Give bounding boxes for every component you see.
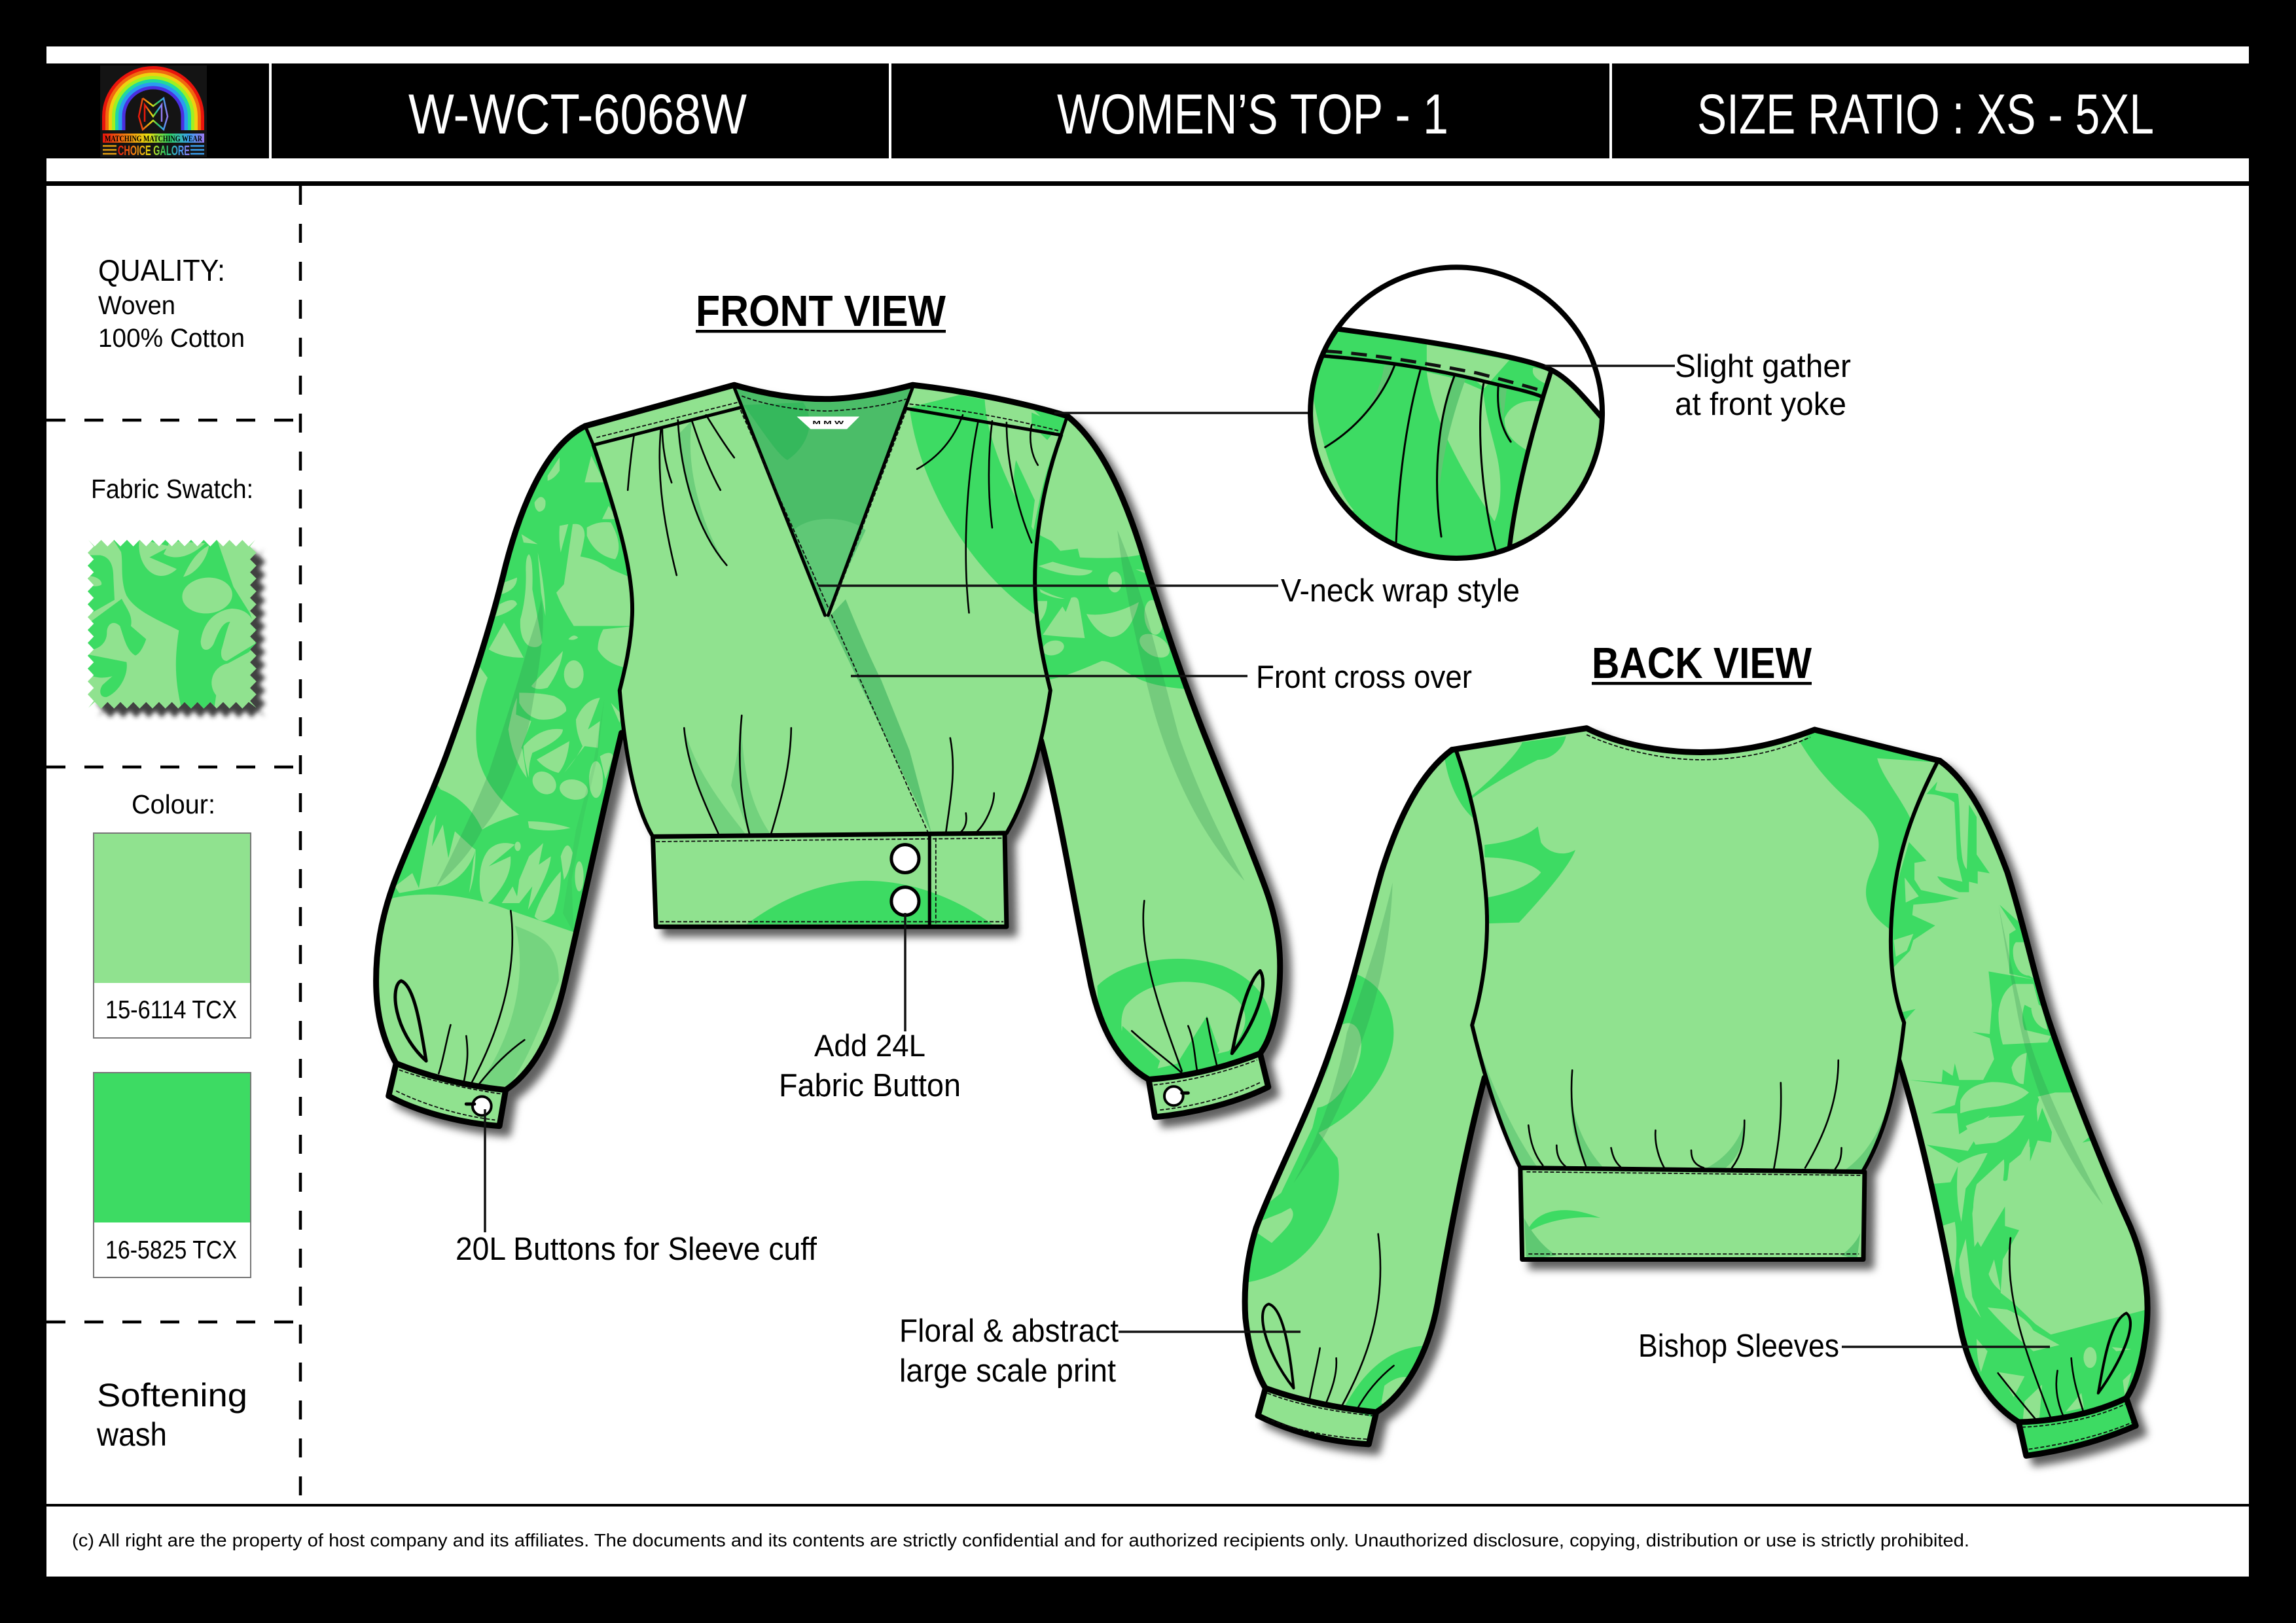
back view heading: BACK VIEW xyxy=(1592,639,1812,688)
style number: W-WCT-6068W xyxy=(408,83,747,146)
fabric swatch xyxy=(83,537,262,713)
right sleeve xyxy=(1021,416,1280,1117)
colour chip 16-5825 xyxy=(94,1073,251,1277)
quality block: Woven xyxy=(98,291,175,320)
callout: front cross over: Front cross over xyxy=(1256,660,1472,695)
neck label: M M W xyxy=(812,420,844,425)
callout: front yoke leader xyxy=(1054,412,1310,414)
waistband xyxy=(653,833,1007,927)
colour chip 15-6114: 15-6114 TCX xyxy=(105,996,237,1024)
callout: fabric button: Add 24L xyxy=(814,1028,925,1063)
waistband print xyxy=(747,881,992,924)
callout: print: Floral & abstract xyxy=(899,1313,1119,1349)
back body xyxy=(1452,728,1940,1260)
logo xyxy=(100,65,207,158)
callout: slight gather: Slight gather xyxy=(1675,349,1851,384)
cross over shadow xyxy=(828,599,931,833)
callout: print: large scale print xyxy=(899,1353,1116,1389)
colour label: Colour: xyxy=(132,789,215,819)
callout: fabric button xyxy=(779,913,961,1103)
cuff buttons xyxy=(466,1086,1188,1116)
print on right front panel xyxy=(910,395,1067,618)
logo: MATCHING MATCHING WEAR xyxy=(105,134,202,143)
footer disclaimer: (c) All right are the property of host company and its affiliates. The documents and its contents are strictly confidential and for authorized recipients only. Unauthorized disclosure, copying, distribution or use is strictly prohibited. xyxy=(72,1530,1969,1550)
callout: v-neck: V-neck wrap style xyxy=(1281,573,1520,609)
wash note: wash xyxy=(96,1416,167,1453)
callout: cuff buttons: 20L Buttons for Sleeve cuff xyxy=(456,1232,817,1267)
detail circle: front yoke gather xyxy=(1309,267,1602,558)
callout: print xyxy=(899,1313,1300,1389)
quality block: 100% Cotton xyxy=(98,324,245,353)
callout: bishop sleeves: Bishop Sleeves xyxy=(1638,1329,1839,1364)
back view garment xyxy=(1244,728,2147,1518)
colour chip 15-6114 xyxy=(94,833,251,1038)
colour chip 16-5825: 16-5825 TCX xyxy=(105,1236,237,1264)
back right sleeve xyxy=(1890,760,2147,1518)
fabric swatch label: Fabric Swatch: xyxy=(91,474,253,504)
quality block xyxy=(98,253,245,353)
size ratio: SIZE RATIO : XS - 5XL xyxy=(1697,83,2154,146)
inner neck xyxy=(734,387,912,615)
callout: slight gather xyxy=(1545,349,1851,422)
front view garment xyxy=(375,385,1280,1126)
left sleeve xyxy=(375,419,646,1126)
callout: fabric button: Fabric Button xyxy=(779,1068,961,1103)
callout: slight gather: at front yoke xyxy=(1675,387,1846,422)
back left sleeve xyxy=(1244,747,1487,1444)
front view heading: FRONT VIEW xyxy=(696,287,946,336)
neck label xyxy=(797,416,859,429)
wash note: Softening xyxy=(97,1377,247,1414)
quality block: QUALITY: xyxy=(98,253,225,287)
body front xyxy=(585,385,1067,927)
header bar xyxy=(46,63,2249,158)
wash note xyxy=(96,1377,247,1453)
garment name: WOMEN’S TOP - 1 xyxy=(1057,83,1448,146)
front buttons xyxy=(891,845,919,915)
logo: CHOICE GALORE xyxy=(118,143,190,158)
